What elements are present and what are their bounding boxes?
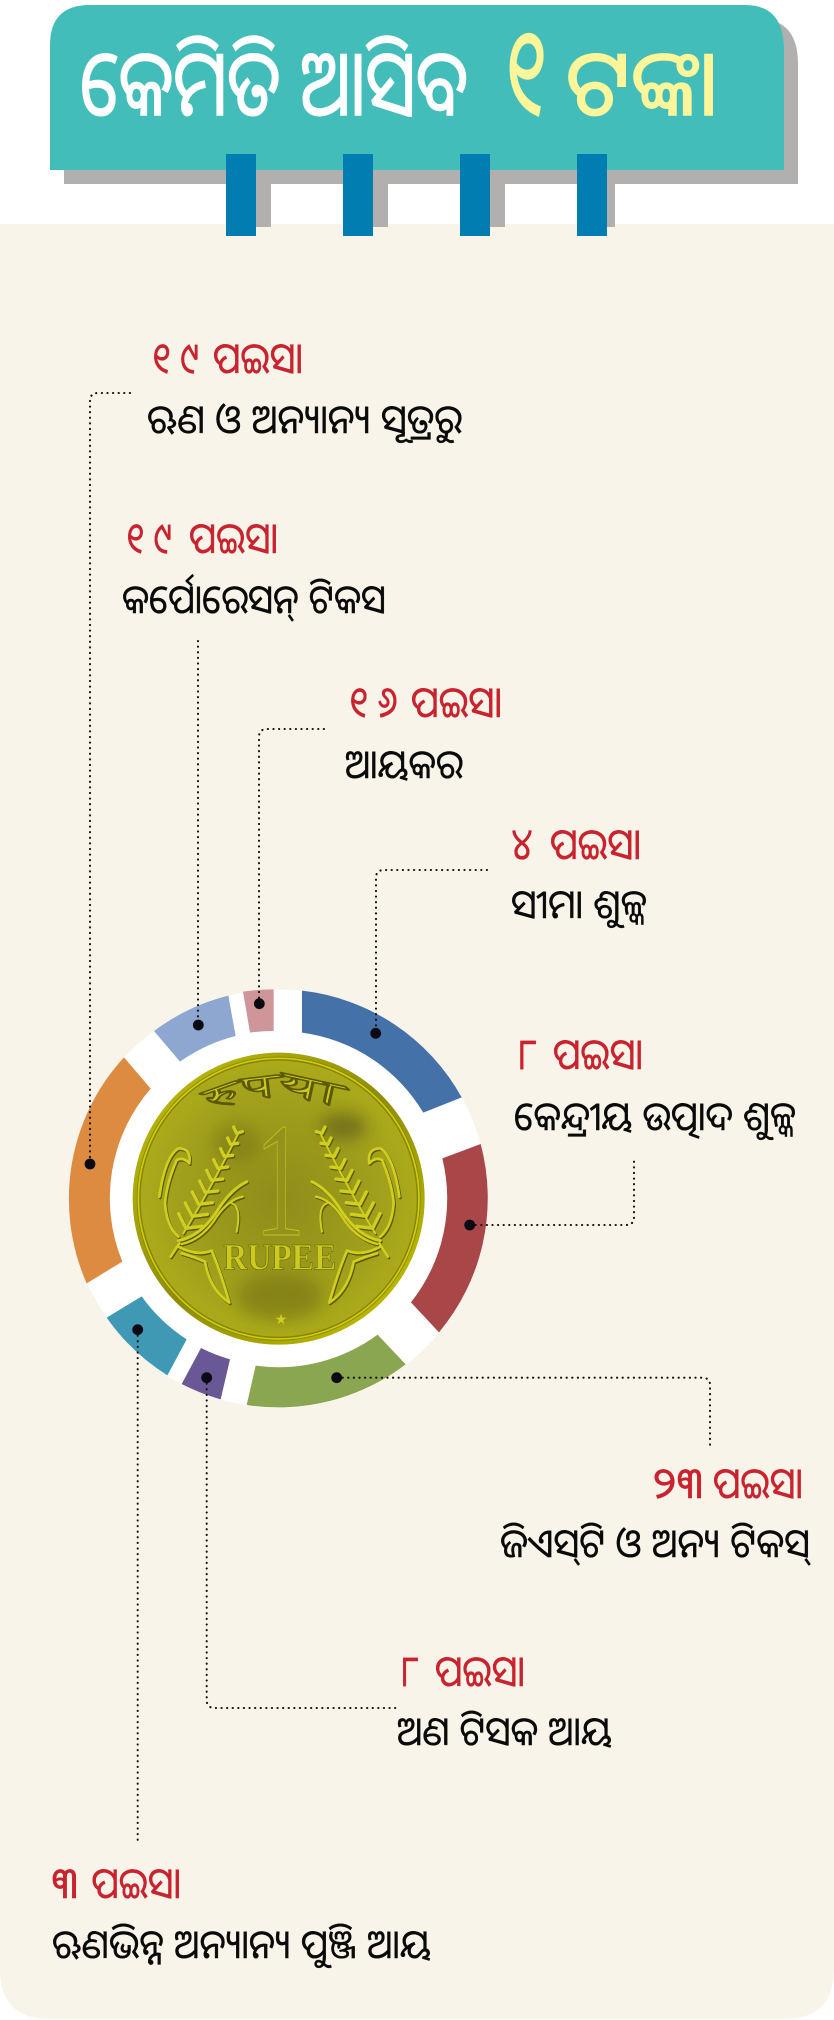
title heading white: କେମିତି ଆସିବ (80, 33, 468, 135)
label: other capital receipts 3 paise: ୩ (52, 1860, 77, 1908)
label: GST 23 paise (500, 1460, 811, 1566)
segment: customs duty (302, 991, 462, 1113)
coin star: ★ (275, 1312, 287, 1328)
label: excise duty 8 paise (514, 1031, 796, 1140)
banner shadow (64, 19, 798, 184)
label: customs duty 4 paise: ୪ (512, 821, 532, 869)
white ring (69, 989, 488, 1408)
donut chart with coin (68, 989, 488, 1408)
label: income tax 16 paise: ୧ ୬ (349, 679, 397, 727)
title word yellow: ଟଙ୍କା (566, 33, 718, 135)
label: non-tax income 8 paise: ଅଣ ଟିସକ ଆୟ (397, 1710, 612, 1754)
title digit yellow: ୧ (505, 5, 547, 141)
segment: other capital receipts (107, 1296, 187, 1375)
label: corporate tax 19 paise: ୧ ୯ (126, 515, 172, 563)
segment: borrowings (69, 1057, 151, 1283)
label: borrowings 19 paise: ୧ ୯ (152, 335, 199, 383)
label: borrowings 19 paise: ପଇସା (213, 335, 303, 383)
label: customs duty 4 paise: ପଇସା (550, 821, 641, 869)
label: GST 23 paise: ପଇସା (713, 1460, 803, 1508)
label: other capital receipts 3 paise (52, 1860, 431, 1968)
leader: non-tax income (201, 1372, 396, 1708)
blue tabs (226, 154, 607, 236)
coin numeral: 1 (255, 1090, 305, 1271)
leader: income tax (254, 729, 324, 1009)
label: other capital receipts 3 paise: ପଇସା (92, 1860, 181, 1908)
leader: corporate tax (193, 641, 204, 1030)
label: customs duty 4 paise: ସୀମା ଶୁଳ୍କ (511, 883, 647, 928)
segment: excise duty (411, 1144, 488, 1332)
label: borrowings 19 paise: ଋଣ ଓ ଅନ୍ୟାନ୍ୟ ସୂତ୍ରରୁ (147, 398, 462, 443)
label: corporate tax 19 paise: ପଇସା (189, 515, 278, 563)
coin Hindi word: रुपया (198, 1072, 350, 1106)
label: borrowings 19 paise (147, 335, 462, 443)
label: corporate tax 19 paise: କର୍ପୋରେସନ୍ ଟିକସ (122, 574, 386, 622)
label: excise duty 8 paise: ପଇସା (553, 1031, 643, 1079)
label: other capital receipts 3 paise: ଋଣଭିନ୍ନ ଅନ୍ୟାନ୍ୟ ପୁଞ୍ଜି ଆୟ (52, 1923, 431, 1968)
label: excise duty 8 paise: ୮ (517, 1031, 537, 1079)
segment: GST (247, 1335, 406, 1407)
tab shadows (256, 183, 615, 227)
label: income tax 16 paise: ପଇସା (411, 679, 502, 727)
leader: customs duty (370, 870, 487, 1039)
label: customs duty 4 paise (511, 821, 647, 928)
label: non-tax income 8 paise (397, 1648, 612, 1754)
leader: GST (331, 1372, 710, 1446)
label: corporate tax 19 paise (122, 515, 386, 622)
leader: borrowings (85, 393, 130, 1169)
segment: non-tax income (182, 1348, 230, 1399)
label: GST 23 paise: ୨୩ (652, 1460, 702, 1508)
label: income tax 16 paise (345, 679, 502, 787)
segment: income tax (243, 989, 274, 1033)
segment: corporate tax (154, 996, 236, 1062)
banner board (50, 5, 784, 170)
leader: other capital receipts (132, 1324, 143, 1843)
leader: excise duty (464, 1159, 634, 1230)
label: non-tax income 8 paise: ପଇସା (435, 1648, 525, 1696)
label: GST 23 paise: ଜିଏସ୍‌ଟି ଓ ଅନ୍ୟ ଟିକସ୍ (500, 1522, 811, 1566)
label: non-tax income 8 paise: ୮ (400, 1648, 419, 1696)
label: income tax 16 paise: ଆୟକର (345, 743, 463, 787)
icon: one rupee coin (132, 1052, 425, 1345)
label: excise duty 8 paise: କେନ୍ଦ୍ରୀୟ ଉତ୍ପାଦ ଶୁଳ୍କ (514, 1095, 796, 1140)
title banner (50, 5, 798, 236)
coin word RUPEE: RUPEE (223, 1237, 336, 1278)
